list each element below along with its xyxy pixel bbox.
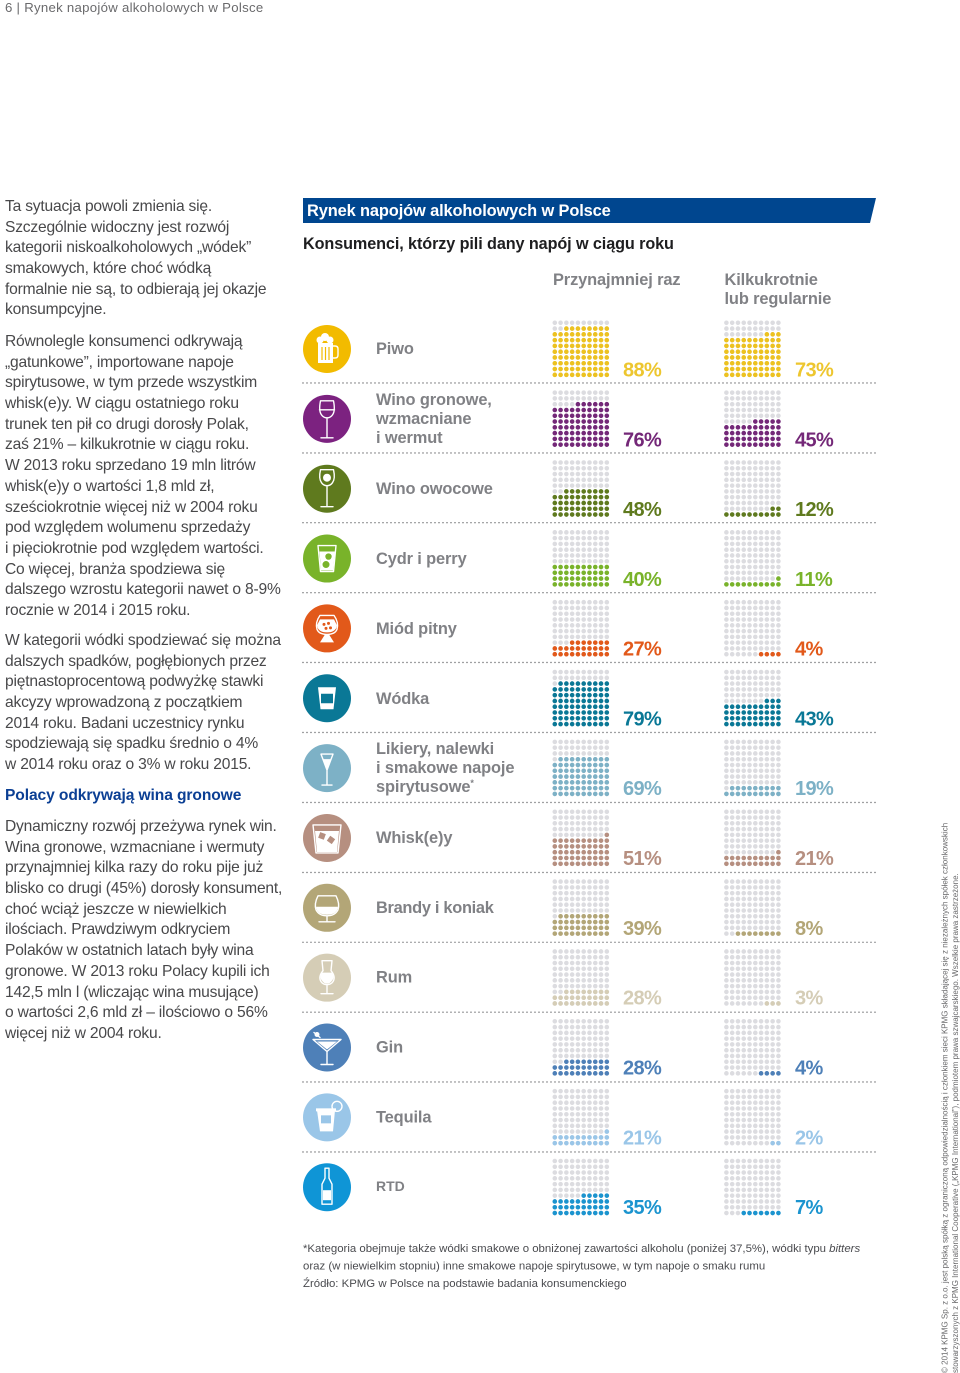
text block: gatunkowe spirits paragraph: i pięciokrotnie pod względem wartości. <box>5 540 263 557</box>
dots: 51% <box>555 812 607 864</box>
dots: 11% <box>726 532 778 584</box>
text block: gatunkowe spirits paragraph: pod względem wolumenu sprzedaży <box>5 519 250 536</box>
dots: 21% <box>555 1091 607 1143</box>
label: Whisk(e)y <box>376 829 453 847</box>
value: 73% <box>795 360 834 382</box>
dots: 35% <box>555 1161 607 1213</box>
value: 11% <box>795 569 833 591</box>
text block: intro paragraph: Ta sytuacja powoli zmienia się. <box>5 198 212 215</box>
value: 4% <box>795 1058 824 1080</box>
icon: martini glass with olive <box>303 1024 351 1072</box>
row: Piwo <box>303 323 834 382</box>
row: RTD <box>303 1161 824 1219</box>
text block: intro paragraph: formalnie nie są, to odbierają jej okazje <box>5 281 266 298</box>
value: 39% <box>623 918 662 940</box>
value: 7% <box>795 1197 824 1219</box>
chart title bar <box>303 198 876 223</box>
text block: wine paragraph: ilościach. Prawdziwym odkryciem <box>5 921 230 938</box>
chart subtitle: Konsumenci, którzy pili dany napój w ciągu roku <box>303 235 674 253</box>
label: Cydr i perry <box>376 550 468 568</box>
icon: wine glass <box>303 395 351 443</box>
chart title bar: Rynek napojów alkoholowych w Polsce <box>307 202 611 220</box>
value: 27% <box>623 638 662 660</box>
dots: 88% <box>555 323 607 375</box>
text block: gatunkowe spirits paragraph: zaś 21% – kilkukrotnie w ciągu roku. <box>5 436 249 453</box>
label: Tequila <box>376 1108 432 1126</box>
label: Brandy i koniak <box>376 899 495 917</box>
text block: gatunkowe spirits paragraph: Co więcej, branża spodziewa się <box>5 561 225 578</box>
label: Miód pitny <box>376 620 458 638</box>
icon: whisky tumbler <box>303 814 351 862</box>
dots: 8% <box>726 882 778 934</box>
row dividers <box>303 383 876 1152</box>
dots: 2% <box>726 1091 778 1143</box>
dots: 28% <box>555 951 607 1003</box>
text block: vodka paragraph: 2014 roku. Badani uczestnicy rynku <box>5 715 244 732</box>
footnotes and source: oraz (w niewielkim stopniu) inne smakowe napoje spirytusowe, w tym napoje o smaku rumu <box>303 1260 765 1272</box>
label: Wódka <box>376 690 430 708</box>
footnotes and source: *Kategoria obejmuje także wódki smakowe o obniżonej zawartości alkoholu (poniżej 37,5%), wódki typu bitters <box>303 1243 860 1255</box>
text block: wine paragraph: więcej niż w 2004 roku. <box>5 1025 162 1042</box>
label: RTD <box>376 1178 405 1194</box>
value: 2% <box>795 1127 824 1149</box>
value: 51% <box>623 848 662 870</box>
text block: wine paragraph: przynajmniej kilka razy do roku pije już <box>5 859 263 876</box>
dots: 73% <box>726 323 778 375</box>
label: Wino gronowe, <box>376 391 492 409</box>
text block: gatunkowe spirits paragraph: „gatunkowe”, importowane napoje <box>5 354 234 371</box>
value: 48% <box>623 499 662 521</box>
row: Likiery <box>303 740 834 800</box>
value: 43% <box>795 708 834 730</box>
text block: intro paragraph: konsumpcyjne. <box>5 301 106 318</box>
row: Miód pitny <box>303 602 824 660</box>
dots: 3% <box>726 951 778 1003</box>
text block: gatunkowe spirits paragraph: whisk(e)y. W ciągu ostatniego roku <box>5 395 239 412</box>
text block: gatunkowe spirits paragraph: Równolegle konsumenci odkrywają <box>5 333 242 350</box>
value: 45% <box>795 429 834 451</box>
text block: intro paragraph: kategorii niskoalkoholowych „wódek” <box>5 239 251 256</box>
text block: intro paragraph: smakowych, które choć wódką <box>5 260 211 277</box>
value: 21% <box>623 1127 662 1149</box>
dots: 48% <box>555 462 607 515</box>
dots: 19% <box>726 742 778 794</box>
label: Piwo <box>376 340 414 358</box>
vertical copyright note: © 2014 KPMG Sp. z o.o. jest polską spółką z ograniczoną odpowiedzialnością i członkiem sieci KPMG składającej się z niezależnych spółek członkowskich <box>940 823 950 1373</box>
value: 88% <box>623 360 662 382</box>
text block: gatunkowe spirits paragraph: sześciokrotnie więcej niż w 2004 roku <box>5 498 258 516</box>
text block: gatunkowe spirits paragraph <box>5 333 281 619</box>
text block: wine paragraph: o wartości 2,6 mld zł – ilościowo o 56% <box>5 1004 268 1021</box>
label: Rum <box>376 969 412 987</box>
value: 35% <box>623 1197 662 1219</box>
value: 76% <box>623 429 662 451</box>
dots: 7% <box>726 1161 778 1213</box>
text block: wine paragraph: 142,5 mln l (wliczając wina musujące) <box>5 984 258 1000</box>
row: Cydr i perry <box>303 532 833 591</box>
value: 19% <box>795 778 834 800</box>
dots: 43% <box>726 672 778 724</box>
text block: gatunkowe spirits paragraph: trunek ten pił co drugi dorosły Polak, <box>5 416 249 433</box>
text block: vodka paragraph: W kategorii wódki spodziewać się można <box>5 632 281 649</box>
text block: gatunkowe spirits paragraph: spirytusowe, w tym przede wszystkim <box>5 374 257 391</box>
text block: vodka paragraph: w 2014 roku oraz o 3% w roku 2015. <box>5 756 251 773</box>
value: 3% <box>795 988 824 1010</box>
label: * <box>470 778 474 788</box>
row: Wino gronowe <box>303 391 834 451</box>
text block: gatunkowe spirits paragraph: dalszego wzrostu kategorii nawet o 8-9% <box>5 581 281 598</box>
label: i smakowe napoje <box>376 759 514 777</box>
subheading: wine: Polacy odkrywają wina gronowe <box>5 787 241 804</box>
text block: vodka paragraph <box>5 632 282 773</box>
icon: cider tumbler <box>303 535 351 583</box>
value: 28% <box>623 1058 662 1080</box>
row: Gin <box>303 1021 824 1080</box>
text block: wine paragraph: Dynamiczny rozwój przeżywa rynek win. <box>5 818 277 835</box>
column header: several times or regularly: Kilkukrotnie <box>724 271 818 289</box>
footnotes and source <box>303 1243 860 1290</box>
text block: wine paragraph: choć wciąż jeszcze w niewielkich <box>5 901 227 918</box>
label: wzmacniane <box>375 410 471 428</box>
value: 4% <box>795 638 824 660</box>
text block: gatunkowe spirits paragraph: W 2013 roku sprzedano 19 mln litrów <box>5 457 255 474</box>
label: Gin <box>376 1038 403 1056</box>
row: Tequila <box>303 1091 824 1149</box>
text block: wine paragraph: Polaków w ostatnich latach były wina <box>5 942 254 959</box>
dots: 4% <box>726 602 778 654</box>
icon: vodka shot glass <box>303 674 351 722</box>
text block: wine paragraph: blisko co drugi (45%) dorosły konsument, <box>5 880 282 897</box>
dots: 79% <box>555 672 607 724</box>
text block: gatunkowe spirits paragraph: rocznie w 2014 i 2015 roku. <box>5 602 190 619</box>
value: 8% <box>795 918 824 940</box>
dots: 39% <box>555 882 607 934</box>
page header: 6 | Rynek napojów alkoholowych w Polsce <box>5 0 263 15</box>
column header: several times or regularly: lub regularnie <box>724 290 831 308</box>
row: Rum <box>303 951 824 1010</box>
value: 28% <box>623 988 662 1010</box>
dots: 76% <box>555 393 607 445</box>
text block: wine paragraph: Wina gronowe, wzmacniane i wermuty <box>5 839 264 856</box>
text block: gatunkowe spirits paragraph: whisk(e)y o wartości 1,8 mld zł, <box>5 478 214 495</box>
value: 40% <box>623 569 662 591</box>
row: Wino owocowe <box>303 462 834 521</box>
label: i wermut <box>376 429 443 447</box>
icon: liqueur glass <box>303 744 351 792</box>
value: 69% <box>623 778 662 800</box>
dots: 4% <box>726 1021 778 1073</box>
label: Likiery, nalewki <box>376 740 494 758</box>
dots: 69% <box>555 742 607 794</box>
dots: 28% <box>555 1021 607 1073</box>
label: Wino owocowe <box>376 480 493 498</box>
icon: beer mug <box>303 325 351 373</box>
vertical copyright note <box>940 823 960 1373</box>
dots: 21% <box>726 812 778 864</box>
text block: intro paragraph <box>5 198 266 318</box>
dots: 45% <box>726 393 778 445</box>
dots: 40% <box>555 532 607 584</box>
icon: brandy snifter <box>303 884 351 932</box>
value: 21% <box>795 848 834 870</box>
label: spirytusowe <box>376 778 470 796</box>
icon: hurricane glass <box>303 954 351 1002</box>
text block: intro paragraph: Szczególnie widoczny jest rozwój <box>5 219 229 236</box>
icon: tequila shot with lime <box>303 1093 351 1141</box>
vertical copyright note: stowarzyszonych z KPMG International Cooperative („KPMG International”), podmiotem prawa szwajcarskiego. Wszelkie prawa zastrzeżone. <box>951 873 960 1373</box>
text block: vodka paragraph: piętnastoprocentową podwyżkę stawki <box>5 673 263 690</box>
icon: mead glass <box>303 604 351 652</box>
dots: 27% <box>555 602 607 654</box>
text block: wine paragraph: gronowe. W 2013 roku Polacy kupili ich <box>5 963 270 980</box>
footnotes and source: Źródło: KPMG w Polsce na podstawie badania konsumenckiego <box>303 1277 627 1290</box>
column header: at least once: Przynajmniej raz <box>553 271 680 289</box>
text block: vodka paragraph: dalszych spadków, pogłębionych przez <box>5 653 267 670</box>
value: 12% <box>795 499 834 521</box>
text block: vodka paragraph: spodziewają się spadku średnio o 4% <box>5 735 258 752</box>
dots: 12% <box>726 462 778 515</box>
row: Whisky <box>303 812 834 870</box>
value: 79% <box>623 708 662 730</box>
row: Brandy i koniak <box>303 882 824 940</box>
row: Wódka <box>303 672 834 730</box>
icon: bottle <box>303 1163 351 1211</box>
icon: fruit wine glass <box>303 465 351 513</box>
text block: wine paragraph <box>5 818 282 1042</box>
text block: vodka paragraph: akcyzy wprowadzoną z początkiem <box>5 694 242 711</box>
